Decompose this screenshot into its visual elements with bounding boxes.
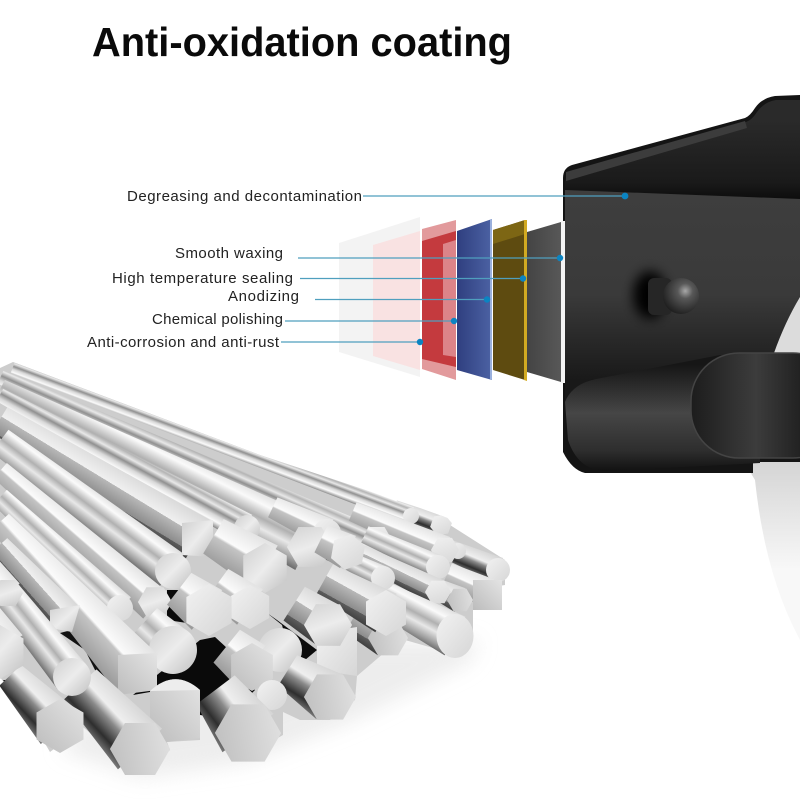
callout: degreasing: Degreasing and decontamination bbox=[127, 188, 362, 205]
callout: chemical polishing bbox=[152, 311, 457, 328]
knob bbox=[633, 271, 699, 319]
callout: anti-corrosion: Anti-corrosion and anti-rust bbox=[87, 334, 280, 351]
housing body bbox=[563, 95, 800, 473]
callout: anodizing bbox=[228, 288, 490, 305]
rods: front row bbox=[0, 514, 356, 775]
housing side panel bbox=[565, 190, 800, 405]
callout: high temperature sealing: High temperature sealing bbox=[112, 270, 293, 287]
callout: smooth waxing bbox=[175, 245, 563, 262]
callout: anti-corrosion bbox=[87, 334, 423, 351]
coating layers stack bbox=[339, 217, 565, 383]
callout: high temperature sealing bbox=[112, 270, 526, 287]
white wedge bbox=[774, 297, 800, 353]
layer: white wax film bbox=[339, 217, 420, 377]
rods: middle row bbox=[0, 425, 413, 676]
layer: red bbox=[422, 220, 456, 380]
housing top edge highlight bbox=[566, 121, 747, 181]
layer: grey base bbox=[527, 222, 561, 382]
layer: pink film bbox=[373, 231, 420, 370]
aluminium rods pile bbox=[0, 359, 510, 788]
callout: degreasing bbox=[127, 188, 628, 205]
pile silhouette base bbox=[0, 362, 505, 775]
rods: back right row bbox=[349, 502, 510, 658]
callout: smooth waxing: Smooth waxing bbox=[175, 245, 283, 262]
lever capsule bbox=[691, 353, 800, 458]
white cutting disc bbox=[740, 455, 800, 640]
dark gaps between rods bbox=[3, 540, 331, 742]
housing top band bbox=[565, 100, 800, 199]
layer: white edge bbox=[561, 221, 565, 383]
layer: blue bbox=[457, 219, 492, 380]
title: Anti-oxidation coating bbox=[92, 19, 512, 65]
callout: anodizing: Anodizing bbox=[228, 288, 299, 305]
callouts with labels bbox=[87, 188, 628, 351]
ground shadow bbox=[60, 640, 480, 778]
layer: gold bbox=[493, 220, 527, 381]
lower cylinder bbox=[565, 355, 760, 471]
product: black tool housing with blade bbox=[563, 95, 800, 640]
rods: upper fan bbox=[0, 359, 445, 570]
callout: chemical polishing: Chemical polishing bbox=[152, 311, 283, 328]
